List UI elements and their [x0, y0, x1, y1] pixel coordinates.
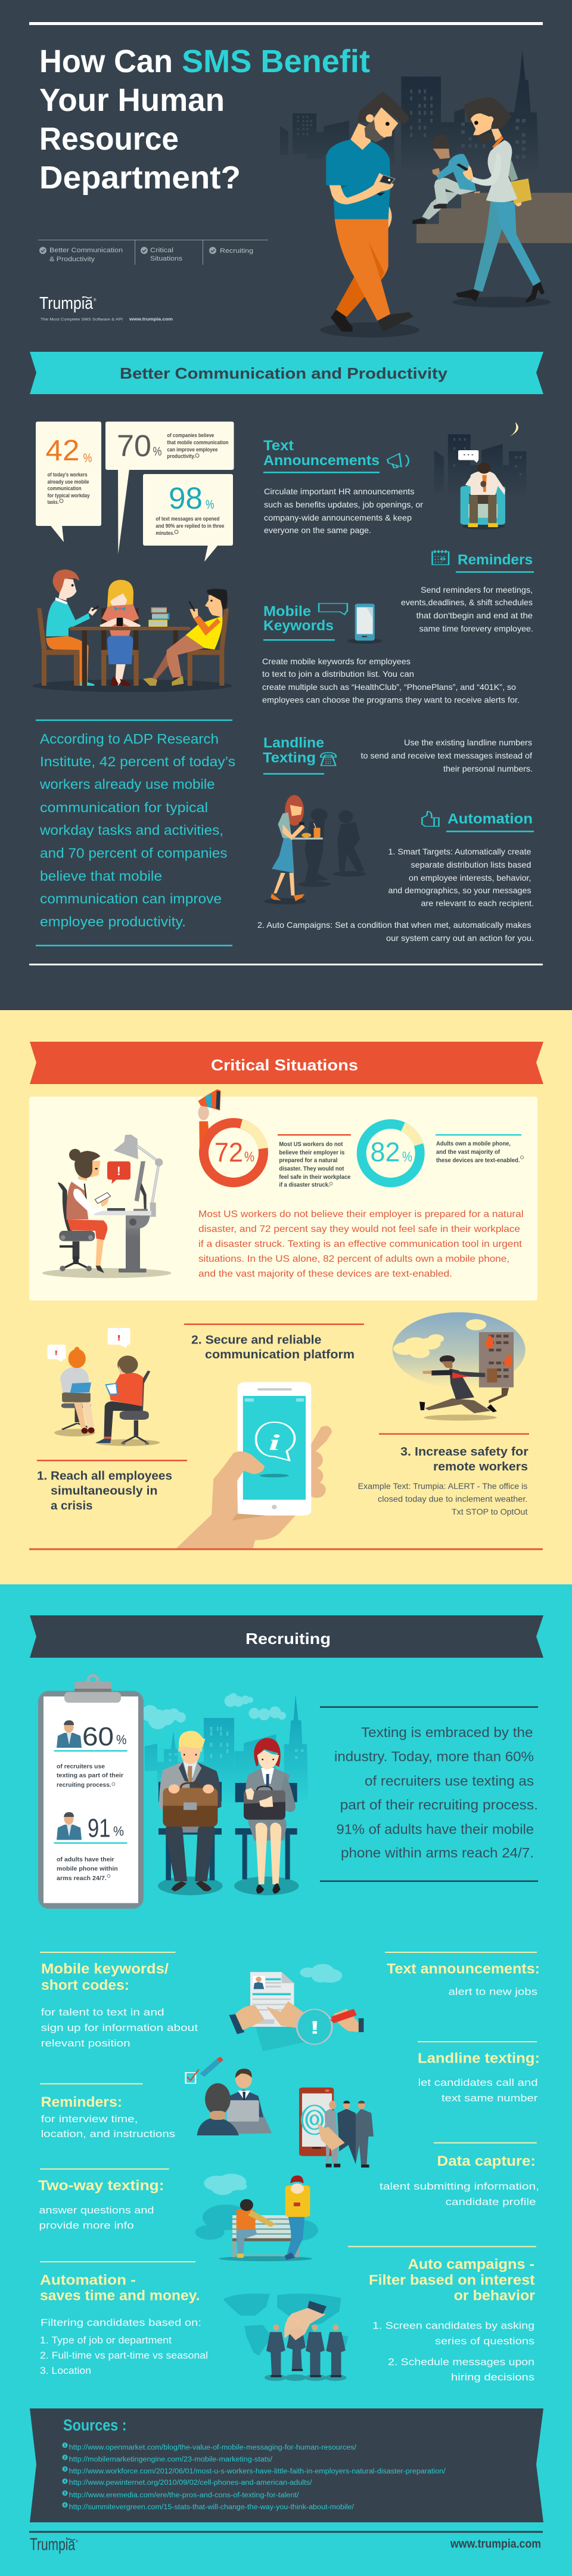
illustration: interview with checklist	[186, 2057, 272, 2135]
city skyline	[280, 51, 539, 172]
callout text: 82 percent: and the vast majority of	[436, 1149, 500, 1156]
chart: 82 percent donut	[362, 1124, 420, 1182]
section banner: Better Communication and Productivity: Better Communication and Productivity	[120, 364, 448, 382]
feature: mobile keywords / short codes: for talent to text in and	[41, 2007, 164, 2018]
section: 2. Secure and reliable communication platform: 2. Secure and reliable	[191, 1334, 321, 1347]
person right	[143, 589, 228, 686]
stat: 60 percent	[54, 1720, 128, 1789]
section: Mobile Keywords: Keywords	[263, 618, 334, 634]
stat: 91 percent: arms reach 24/7.	[57, 1875, 107, 1882]
callout: 70 percent	[105, 422, 234, 554]
section banner: Critical Situations: Critical Situations	[211, 1056, 358, 1074]
section: Automation: Automation	[447, 811, 533, 827]
illustration: tired man at night	[434, 422, 526, 530]
feature: data capture: talent submitting information,	[380, 2181, 539, 2192]
footer: Trumpia	[30, 2535, 76, 2555]
person left	[46, 569, 98, 686]
chart: 72 percent donut: %	[244, 1149, 254, 1165]
feature: auto campaigns: 2. Schedule messages upon	[388, 2356, 534, 2367]
end rule dark section	[29, 964, 543, 965]
feature: auto campaigns: hiring decisions	[451, 2371, 534, 2383]
table	[70, 627, 191, 686]
section: Mobile Keywords: to text to join a distribution list. You can	[262, 669, 414, 679]
seated figure	[412, 135, 480, 224]
feature: reminders: location, and instructions	[41, 2128, 175, 2140]
source list: http://www.pewinternet.org/2010/09/02/cell-phones-and-american-adults/	[69, 2479, 312, 2487]
text block: urgent situations: if a disaster struck. Texting is an effective communication tool in urgent	[198, 1239, 523, 1249]
male candidate	[159, 1731, 222, 1891]
stat: 91 percent: %	[113, 1824, 124, 1839]
feature: mobile keywords / short codes: sign up for information about	[41, 2022, 198, 2033]
source list: 2	[64, 2456, 66, 2460]
text block: texting embraced by the industry: 91% of adults have their mobile	[336, 1822, 534, 1837]
four candidates	[265, 2318, 347, 2381]
icon: raised arm with megaphone	[198, 1089, 220, 1152]
computer monitor	[135, 1161, 145, 1202]
text block: ADP research summary: employee productivity.	[40, 914, 186, 930]
callout: 42 percent: %	[83, 451, 92, 465]
Trumpia logo and tagline: www.trumpia.com	[129, 316, 173, 322]
section: Reminders: events,deadlines, & shift schedules	[401, 597, 533, 607]
feature: two-way texting: provide more info	[39, 2219, 134, 2231]
feature: auto campaigns: or behavior	[454, 2287, 535, 2304]
feature: two-way texting: Two-way texting:	[38, 2178, 164, 2194]
callout: 98 percent: and 90% are replied to in three	[156, 523, 224, 529]
top rule	[29, 22, 543, 25]
feature: landline texting: Landline texting:	[418, 2051, 540, 2067]
office worker	[96, 1239, 104, 1266]
callout: 98 percent: %	[206, 498, 214, 512]
feature: data capture: Data capture:	[437, 2153, 536, 2169]
feature: text announcements: Text announcements:	[387, 1961, 540, 1977]
title	[39, 44, 370, 196]
text block: ADP research summary	[36, 719, 235, 946]
panel: teal background	[0, 1584, 572, 2576]
callout: 42 percent: communication	[48, 485, 82, 491]
title: Department?	[39, 160, 241, 196]
source list: 1	[64, 2444, 66, 2448]
callout text: 72 percent: Most US workers do not	[279, 1141, 343, 1148]
callout: 70 percent: productivity.	[167, 453, 195, 459]
callout: 42 percent	[36, 422, 101, 542]
stat: 60 percent: texting as part of their	[57, 1773, 123, 1779]
panel: sources: Sources :	[63, 2416, 126, 2434]
benches	[158, 1782, 297, 1880]
text block: urgent situations: Most US workers do not believe their employer is prepared for a natural	[198, 1209, 524, 1219]
feature: text announcements	[385, 1952, 540, 1998]
illustration: woman at desk	[42, 1135, 172, 1278]
phone	[238, 1382, 311, 1516]
text block: texting embraced by the industry: industry. Today, more than 60%	[334, 1748, 534, 1764]
panel: dark background	[0, 0, 572, 1010]
illustration: hand holding phone	[176, 1382, 332, 1549]
illustration: running from burning building	[393, 1312, 526, 1420]
feature: auto campaigns	[348, 2246, 536, 2383]
callout: 42 percent: for typical workday	[48, 493, 90, 499]
contents navigation: Situations	[150, 255, 183, 262]
footer: ®	[76, 2540, 79, 2544]
section: Landline Texting: to send and receive text messages instead of	[361, 751, 532, 760]
panel: sources	[30, 2408, 543, 2522]
section: Automation	[257, 811, 534, 943]
section: 1. Reach all employees	[37, 1460, 187, 1513]
feature: auto campaigns: Filter based on interest	[369, 2272, 535, 2289]
section: Landline Texting	[263, 735, 533, 775]
text block: ADP research summary: workers already use mobile	[39, 776, 215, 792]
title: Your Human	[39, 82, 225, 118]
text block: texting embraced by the industry: part of their recruiting process.	[340, 1797, 538, 1813]
footer	[29, 2531, 543, 2555]
contents navigation: & Productivity	[49, 256, 95, 263]
feature: data capture	[380, 2142, 539, 2207]
section: Reminders: that don'tbegin and end at the	[416, 611, 533, 620]
text block: urgent situations	[198, 1209, 524, 1279]
feature: automation: 2. Full-time vs part-time vs seasonal	[40, 2350, 208, 2361]
reaching hand	[284, 2306, 325, 2340]
section banner: Better Communication and Productivity	[30, 352, 543, 394]
callout: 42 percent: tasks.	[48, 499, 59, 505]
callout text: 72 percent: feel safe in their workplace	[279, 1174, 351, 1181]
illustration: woman with food tray and shadow figures	[264, 795, 366, 905]
callout: 70 percent: can improve employee	[167, 447, 217, 453]
panel: critical statistics	[29, 1089, 537, 1301]
text block: urgent situations: situations. In the US alone, 82 percent of adults own a mobile phone,	[198, 1254, 509, 1264]
contents navigation: Critical	[150, 247, 173, 254]
feature: text announcements: alert to new jobs	[448, 1986, 537, 1998]
world map	[223, 2293, 349, 2355]
icon: chat bubble and phone	[319, 603, 383, 644]
feature: automation: 1. Type of job or department	[40, 2334, 172, 2346]
feature: mobile keywords / short codes: short codes:	[41, 1977, 129, 1993]
contents navigation: Better Communication	[49, 247, 123, 254]
section: 1. Reach all employees: simultaneously in	[51, 1485, 157, 1498]
illustration: resume review with magnifier: !	[310, 2018, 320, 2038]
section: Automation: separate distribution lists based	[411, 860, 531, 869]
callout text: 82 percent: these devices are text-enabled.	[436, 1157, 520, 1164]
desk	[126, 1215, 140, 1269]
chairs	[37, 608, 229, 686]
clouds	[142, 1693, 286, 1729]
source list	[62, 2442, 446, 2511]
seated reader	[237, 2199, 275, 2258]
illustration: coworkers with alerts: !	[117, 1334, 121, 1342]
source list: http://mobilemarketingengine.com/23-mobile-marketing-stats/	[69, 2456, 273, 2463]
section: Text Announcements: Announcements	[263, 453, 380, 469]
icon: telephone	[321, 753, 336, 766]
section: 1. Reach all employees: 1. Reach all employees	[37, 1470, 172, 1483]
callout: 98 percent: minutes.	[156, 530, 174, 536]
icon: calendar	[433, 550, 449, 565]
section: Reminders	[401, 550, 534, 633]
icon: megaphone	[387, 454, 409, 468]
callout text: 82 percent	[436, 1134, 523, 1164]
female candidate	[244, 1738, 296, 1893]
callout: 42 percent: of today's workers	[48, 472, 88, 478]
callout: 70 percent: 70	[117, 429, 151, 463]
section banner: Critical Situations	[30, 1042, 543, 1084]
text block: ADP research summary: believe that mobile	[40, 868, 162, 884]
illustration: coworkers with alerts	[48, 1328, 160, 1446]
text block: ADP research summary: and 70 percent of companies	[40, 846, 228, 861]
section: Automation: on employee interests, behavior,	[409, 873, 531, 883]
coworker left	[60, 1347, 95, 1433]
stat: 91 percent	[54, 1812, 128, 1882]
illustration: woman at desk: !	[117, 1165, 121, 1178]
Trumpia logo and tagline: Trumpia	[39, 294, 94, 313]
chart: 72 percent donut: 72	[214, 1137, 243, 1168]
section: Text Announcements: such as benefits updates, job openings, or	[264, 500, 423, 509]
Trumpia logo and tagline: The Most Complete SMS Software & API	[41, 317, 123, 322]
contents navigation: Recruiting	[220, 247, 253, 255]
section: Text Announcements: Text	[263, 438, 294, 454]
bench	[232, 2215, 299, 2257]
chart: 82 percent donut: %	[402, 1149, 412, 1165]
icon: recruiter second	[57, 1812, 82, 1840]
section: Reminders: Send reminders for meetings,	[421, 585, 533, 595]
stat: 91 percent: mobile phone within	[57, 1866, 118, 1872]
illustration: hand selecting candidate on world map	[223, 2293, 349, 2381]
desk lamp	[114, 1135, 163, 1217]
section: Landline Texting: Use the existing landline numbers	[404, 738, 532, 747]
source list: 5	[64, 2491, 66, 2496]
panel: yellow background	[0, 1010, 572, 1584]
feature: reminders: for interview time,	[41, 2113, 138, 2125]
feature: two-way texting	[38, 2168, 169, 2231]
section: Mobile Keywords	[262, 603, 520, 705]
feature: mobile keywords / short codes: relevant position	[41, 2038, 130, 2049]
section: Automation: our system carry out an action for you.	[386, 933, 534, 943]
skyline windows	[297, 89, 526, 159]
stat: 60 percent: 60	[82, 1722, 114, 1751]
chart: 72 percent donut	[204, 1123, 263, 1182]
woman walking	[452, 97, 551, 308]
stacked books	[148, 607, 169, 627]
Trumpia logo and tagline	[39, 294, 173, 322]
callout: 42 percent: already use mobile	[48, 479, 89, 485]
section: Reminders: same time forevery employee.	[419, 624, 533, 633]
city	[145, 1695, 308, 1801]
illustration: three people at a table	[32, 569, 232, 692]
callout text: 72 percent: prepared for a natural	[279, 1157, 338, 1164]
section: Text Announcements: Circulate important HR announcements	[264, 487, 415, 496]
text block: ADP research summary: communication for typical	[40, 800, 208, 815]
feature: automation: saves time and money.	[40, 2287, 200, 2304]
text block: texting embraced by the industry: Texting is embraced by the	[361, 1724, 533, 1740]
section: Text Announcements: everyone on the same page.	[264, 525, 371, 535]
brown briefcase	[163, 1799, 217, 1826]
section: 1. Reach all employees: a crisis	[51, 1500, 93, 1513]
callout text: 82 percent: Adults own a mobile phone,	[436, 1141, 511, 1147]
text block: urgent situations: disaster, and 72 percent say they would not feel safe in their workplace	[198, 1224, 520, 1234]
feature: two-way texting: answer questions and	[39, 2205, 154, 2216]
feature: reminders: Reminders:	[41, 2094, 122, 2110]
section: Mobile Keywords: employees can choose the programs they want to receive alerts for.	[262, 695, 520, 705]
callout text: 72 percent: disaster. They would not	[279, 1166, 344, 1172]
man walking with phone	[320, 92, 419, 338]
source list: 3	[64, 2467, 66, 2472]
text block: ADP research summary: According to ADP Research	[40, 731, 219, 747]
section: 3. Increase safety for remote workers: closed today due to inclement weather.	[378, 1494, 527, 1504]
footer: www.trumpia.com	[450, 2537, 541, 2550]
section: Text Announcements: company-wide announcements & keep	[264, 513, 412, 522]
illustration: people on park bench	[195, 2174, 318, 2261]
feature: landline texting: let candidates call and	[418, 2077, 537, 2088]
text block: ADP research summary: workday tasks and activities,	[39, 822, 223, 838]
office chair	[58, 1182, 73, 1233]
hero illustration: city and walking people	[280, 51, 572, 338]
callout: 42 percent: 42	[45, 435, 80, 467]
panel: clipboard statistics	[38, 1676, 144, 1909]
source list: 4	[64, 2479, 66, 2484]
section: Mobile Keywords: Create mobile keywords for employees	[262, 657, 411, 666]
feature: mobile keywords / short codes: Mobile keywords/	[41, 1961, 169, 1977]
callout text: 72 percent: believe their employer is	[279, 1150, 345, 1156]
section: 3. Increase safety for remote workers	[358, 1433, 529, 1516]
section: Automation: 1. Smart Targets: Automatically create	[388, 847, 531, 856]
section: Automation: are relevant to each recipient.	[421, 899, 534, 908]
section banner: Recruiting	[30, 1615, 543, 1658]
title: How Can	[39, 44, 173, 79]
section: Text Announcements	[263, 438, 423, 535]
title: Resource	[39, 121, 179, 157]
feature: landline texting: text same number	[442, 2092, 538, 2104]
stat: 60 percent: %	[116, 1732, 126, 1747]
illustration: resume review with magnifier	[229, 1964, 363, 2051]
callout: 98 percent: of text messages are opened	[156, 516, 219, 522]
callout text: 72 percent	[278, 1134, 351, 1188]
text block: texting embraced by the industry: of recruiters use texting as	[365, 1773, 534, 1788]
section: Mobile Keywords: create multiple such as “HealthClub”, “PhonePlans”, and “401K”, so	[262, 682, 516, 692]
feature: automation: Filtering candidates based on:	[41, 2317, 201, 2328]
dark handbag	[244, 1799, 285, 1820]
title: SMS Benefit	[182, 44, 370, 79]
stat: 60 percent: of recruiters use	[57, 1764, 105, 1770]
callout: 70 percent: %	[153, 445, 162, 459]
source list: 6	[64, 2503, 66, 2507]
illustration: candidates waiting with city behind	[142, 1693, 308, 1895]
section: Landline Texting: Landline	[263, 735, 324, 751]
text block: urgent situations: and the vast majority of these devices are text-enabled.	[198, 1269, 452, 1279]
feature: auto campaigns: Auto campaigns -	[408, 2256, 534, 2272]
feature: mobile keywords / short codes	[40, 1952, 198, 2049]
stat: 60 percent: recruiting process.	[57, 1782, 111, 1789]
section banner: Recruiting: Recruiting	[245, 1630, 331, 1648]
section: 2. Secure and reliable communication platform: communication platform	[205, 1348, 355, 1361]
illustration: phone fingerprint with team	[299, 2088, 374, 2168]
source list: http://www.workforce.com/2012/06/01/most-u-s-workers-have-little-faith-in-employers-natural-disaster-preparation/	[69, 2468, 446, 2475]
section: 2. Secure and reliable communication platform	[184, 1324, 364, 1361]
contents navigation	[38, 240, 268, 265]
illustration: coworkers with alerts: !	[54, 1349, 58, 1357]
source list: http://www.openmarket.com/blog/the-value-of-mobile-messaging-for-human-resources/	[69, 2444, 357, 2451]
alert bubble	[107, 1162, 130, 1179]
feature: automation	[40, 2261, 208, 2376]
text block: texting embraced by the industry: phone within arms reach 24/7.	[341, 1845, 534, 1860]
icon: thumbs up	[422, 812, 439, 826]
chart: 82 percent donut: 82	[371, 1137, 400, 1168]
text block: texting embraced by the industry	[320, 1707, 538, 1882]
source list: http://summitevergreen.com/15-stats-that-will-change-the-way-you-think-about-mobile/	[69, 2504, 355, 2511]
icon: recruiter	[57, 1720, 82, 1748]
callout: 98 percent: 98	[169, 481, 203, 515]
section: Reminders: Reminders	[458, 552, 533, 568]
stone steps	[416, 193, 572, 243]
feature: reminders	[40, 2083, 175, 2140]
feature: auto campaigns: 1. Screen candidates by asking	[372, 2320, 534, 2332]
text block: ADP research summary: communication can improve	[40, 891, 222, 906]
callout text: 72 percent: if a disaster struck.	[279, 1182, 330, 1188]
section: Mobile Keywords: Mobile	[263, 603, 311, 620]
feature: automation: 3. Location	[40, 2365, 91, 2376]
callout: 98 percent	[143, 474, 233, 562]
section: Landline Texting: their personal numbers.	[443, 764, 533, 773]
phone: i	[269, 1431, 280, 1455]
team of three	[325, 2101, 374, 2168]
stat: 91 percent: 91	[88, 1814, 111, 1843]
callout: 70 percent: of companies believe	[167, 432, 214, 438]
section: 3. Increase safety for remote workers: 3. Increase safety for	[400, 1445, 529, 1459]
running man	[419, 1355, 497, 1413]
section: Landline Texting: Texting	[263, 750, 316, 766]
stat: 91 percent: of adults have their	[57, 1857, 114, 1863]
standing man	[285, 2175, 310, 2260]
feature: landline texting	[418, 2041, 540, 2104]
feature: automation: Automation -	[40, 2272, 136, 2289]
person middle	[100, 580, 141, 686]
section: Automation: 2. Auto Campaigns: Set a condition that when met, automatically makes	[257, 920, 531, 930]
bottom rule critical section	[29, 1548, 543, 1550]
section: 3. Increase safety for remote workers: Example Text: Trumpia: ALERT - The office is	[358, 1481, 527, 1491]
coworker right	[95, 1355, 150, 1445]
section: 3. Increase safety for remote workers: remote workers	[433, 1460, 528, 1473]
section: 3. Increase safety for remote workers: Txt STOP to OptOut	[452, 1507, 528, 1516]
feature: data capture: candidate profile	[446, 2196, 536, 2207]
Trumpia logo and tagline: ®	[94, 298, 97, 302]
text block: ADP research summary: Institute, 42 percent of today’s	[40, 754, 235, 769]
callout: 70 percent: that mobile communication	[167, 439, 228, 445]
section: Automation: and demographics, so your messages	[388, 886, 531, 895]
source list: http://www.eremedia.com/ere/the-pros-and-cons-of-texting-for-talent/	[69, 2492, 299, 2499]
feature: auto campaigns: series of questions	[435, 2335, 534, 2347]
floor shadows	[158, 1877, 223, 1895]
